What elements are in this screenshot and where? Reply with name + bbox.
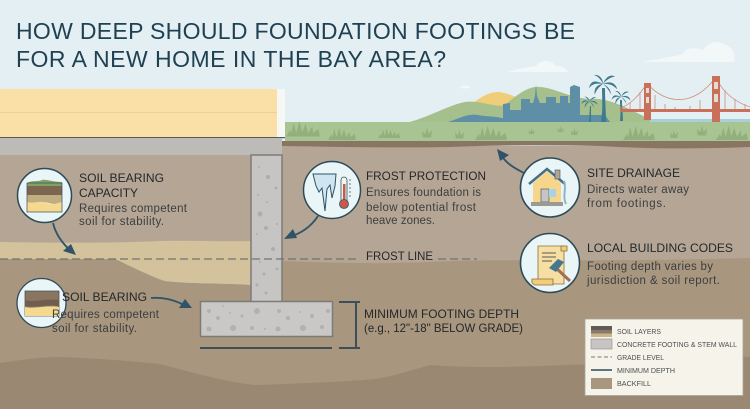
legend: backfill: BACKFILL bbox=[617, 379, 651, 388]
Golden Gate Bridge bbox=[620, 76, 750, 122]
text: soil bearing capacity: Requires competent bbox=[79, 203, 188, 215]
soil: sand layer bbox=[0, 241, 251, 285]
text: local building codes bbox=[586, 241, 733, 287]
legend bbox=[585, 319, 743, 396]
water bbox=[650, 119, 750, 124]
icon: icicle and thermometer bbox=[304, 162, 360, 218]
text: frost protection: FROST PROTECTION bbox=[366, 169, 486, 183]
title bbox=[16, 18, 575, 72]
house siding bbox=[0, 89, 285, 138]
label: minimum footing depth: MINIMUM FOOTING DEPTH bbox=[364, 307, 519, 321]
text: local building codes: Footing depth varies by bbox=[587, 261, 713, 273]
legend: soil layers bbox=[591, 326, 661, 337]
topsoil strip bbox=[282, 141, 750, 148]
label: minimum footing depth bbox=[364, 307, 523, 335]
text: local building codes: jurisdiction & soil report. bbox=[586, 275, 720, 287]
icon: soil cross-section bbox=[17, 278, 66, 328]
callout: site drainage bbox=[497, 149, 689, 217]
label: minimum footing depth: (e.g., 12"-18" BELOW GRADE) bbox=[364, 321, 523, 335]
text: site drainage bbox=[587, 166, 689, 210]
legend: minimum depth: MINIMUM DEPTH bbox=[617, 366, 675, 375]
label: frost line: FROST LINE bbox=[366, 249, 433, 263]
landscape: hills, skyline, palms bbox=[400, 75, 750, 124]
legend: concrete bbox=[591, 339, 737, 349]
title: HOW DEEP SHOULD FOUNDATION FOOTINGS BE bbox=[16, 18, 575, 44]
callout: soil bearing capacity bbox=[18, 168, 188, 255]
concrete slab bbox=[0, 138, 282, 155]
text: soil bearing capacity: soil for stability. bbox=[79, 216, 164, 228]
palm trees bbox=[581, 75, 630, 122]
text: soil bearing capacity bbox=[79, 171, 188, 228]
soil: upper layer bbox=[0, 146, 750, 275]
text: soil bearing capacity: CAPACITY bbox=[79, 186, 138, 200]
text: frost protection bbox=[366, 169, 486, 227]
callout: frost protection bbox=[284, 162, 486, 239]
green hills bbox=[400, 87, 660, 124]
text: soil bearing capacity: SOIL BEARING bbox=[79, 171, 164, 185]
grass meadow bbox=[285, 121, 750, 142]
frost line dashed bbox=[0, 258, 477, 260]
icon: house with downspout bbox=[520, 158, 580, 217]
stem wall bbox=[251, 155, 282, 302]
arrow: to frost line bbox=[53, 223, 76, 255]
text: soil bearing: Requires competent bbox=[52, 309, 160, 321]
callout: local building codes bbox=[520, 234, 733, 292]
yellow hill bbox=[465, 92, 535, 110]
clouds bbox=[460, 42, 735, 88]
arrow: to footing bbox=[151, 298, 192, 308]
soil: deep layer bbox=[0, 357, 750, 409]
text: frost protection: Ensures foundation is bbox=[366, 187, 481, 199]
text: soil bearing: soil for stability. bbox=[52, 323, 137, 335]
minimum depth line and bracket bbox=[200, 302, 360, 348]
icon: soil layers bbox=[18, 168, 72, 222]
text: soil bearing bbox=[52, 290, 160, 335]
legend: backfill bbox=[591, 378, 651, 389]
arrow: to ground surface bbox=[497, 149, 524, 173]
legend: soil layers: SOIL LAYERS bbox=[617, 327, 661, 336]
legend: concrete: CONCRETE FOOTING & STEM WALL bbox=[617, 340, 737, 349]
text: soil bearing: SOIL BEARING bbox=[62, 290, 147, 304]
legend: minimum depth bbox=[591, 366, 675, 375]
title: FOR A NEW HOME IN THE BAY AREA? bbox=[16, 46, 446, 72]
concrete footing bbox=[200, 302, 332, 336]
callout: soil bearing bbox=[17, 278, 192, 335]
text: frost protection: heave zones. bbox=[366, 215, 435, 227]
text: local building codes: LOCAL BUILDING CODES bbox=[587, 241, 733, 255]
legend: grade level: GRADE LEVEL bbox=[617, 353, 664, 362]
legend: grade level bbox=[591, 353, 664, 362]
soil: middle layer bbox=[0, 258, 750, 409]
text: site drainage: SITE DRAINAGE bbox=[587, 166, 680, 180]
icon: scroll and hammer bbox=[520, 234, 580, 292]
text: frost protection: below potential frost bbox=[366, 202, 477, 214]
sky background bbox=[0, 0, 750, 150]
text: site drainage: from footings. bbox=[587, 198, 666, 210]
text: site drainage: Directs water away bbox=[587, 184, 689, 196]
arrow: to stem wall bbox=[284, 216, 318, 239]
city skyline bbox=[448, 85, 610, 122]
